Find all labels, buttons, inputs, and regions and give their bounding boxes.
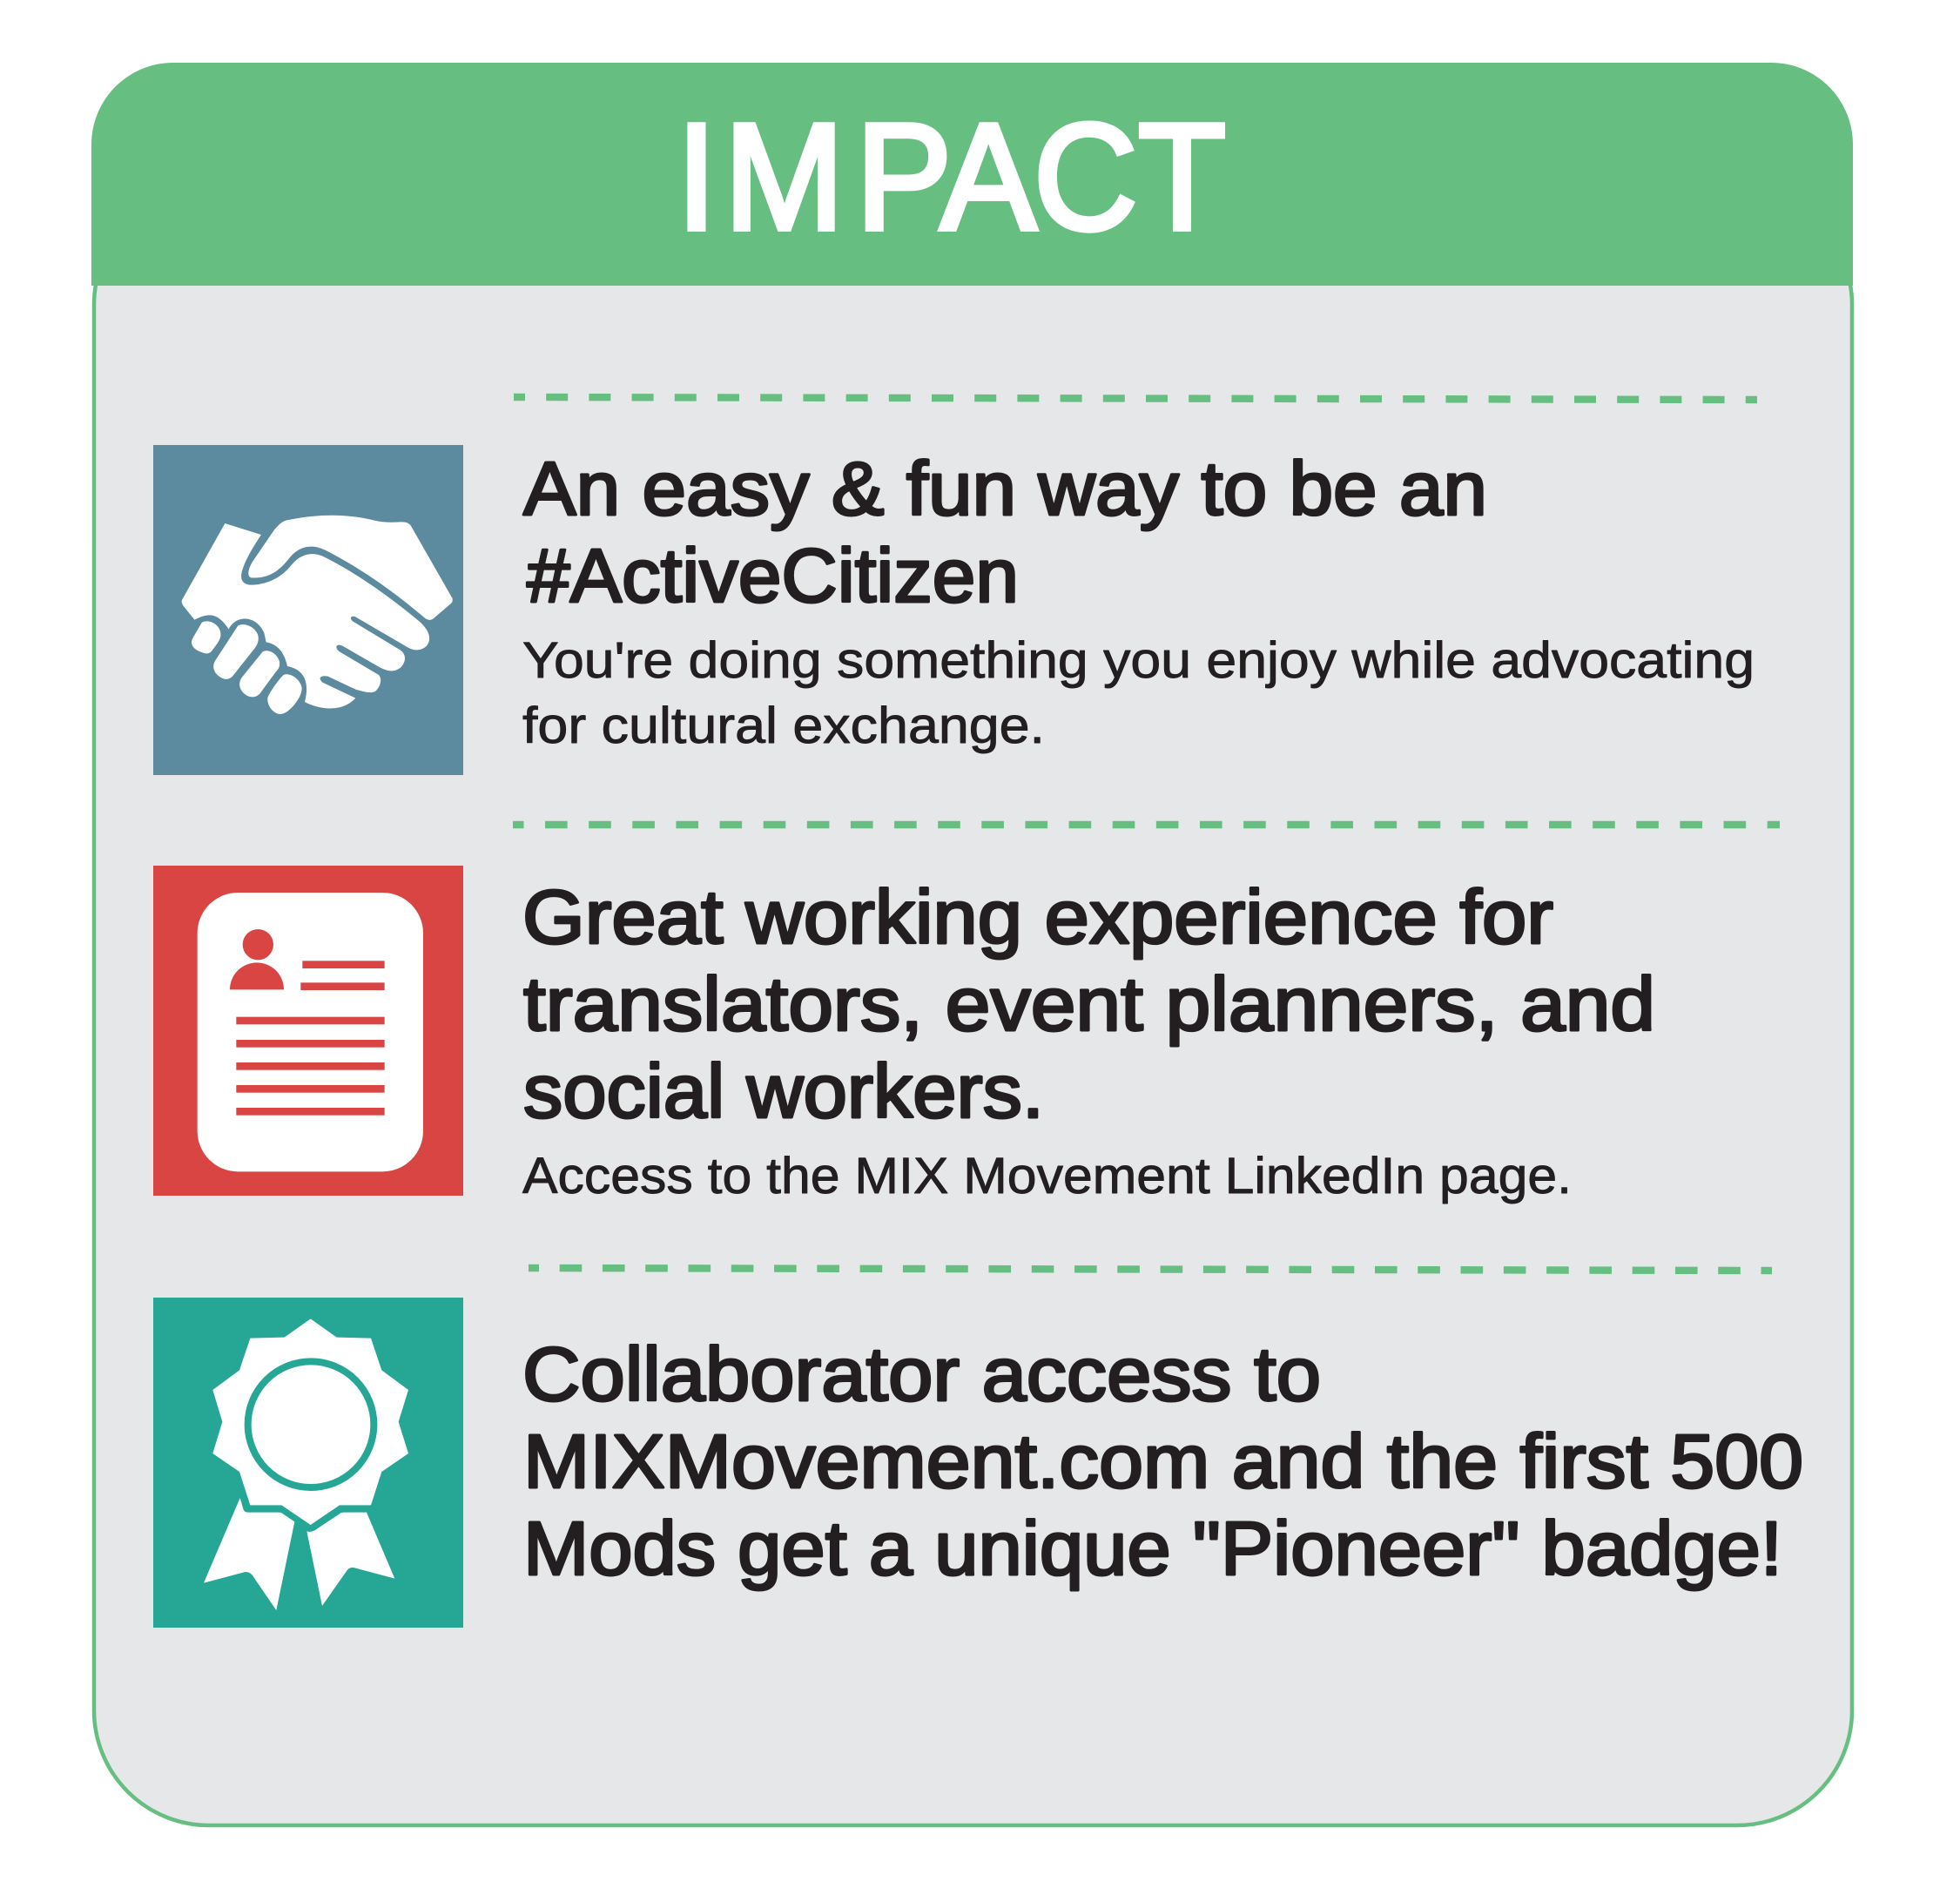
heading: collaborator access: Collaborator access to bbox=[522, 1332, 1321, 1417]
title: IMPACT bbox=[677, 91, 1226, 261]
heading: active citizen: An easy & fun way to be an bbox=[523, 447, 1487, 531]
heading: working experience: translators, event planners, and bbox=[523, 962, 1655, 1047]
heading: collaborator access bbox=[522, 1332, 1803, 1591]
body text: active citizen: for cultural exchange. bbox=[522, 698, 1045, 754]
item: collaborator access bbox=[153, 1298, 1803, 1628]
item: active citizen bbox=[153, 445, 1755, 775]
header band bbox=[91, 63, 1853, 286]
heading: working experience: Great working experience for bbox=[522, 875, 1553, 960]
panel: content background bbox=[94, 190, 1852, 1825]
icon: handshake bbox=[153, 445, 463, 775]
body text: active citizen bbox=[522, 632, 1755, 754]
item: working experience bbox=[153, 866, 1655, 1204]
heading: active citizen: #ActiveCitizen bbox=[527, 534, 1019, 618]
body text: LinkedIn access: Access to the MIX Movement LinkedIn page. bbox=[522, 1148, 1572, 1204]
body text: active citizen: You're doing something you enjoy while advocating bbox=[522, 632, 1755, 689]
heading: collaborator access: Mods get a unique "Pioneer" badge! bbox=[523, 1507, 1782, 1591]
heading: working experience: social workers. bbox=[523, 1049, 1044, 1134]
icon: resume document bbox=[153, 866, 463, 1196]
heading: active citizen bbox=[523, 447, 1487, 618]
icon: award ribbon bbox=[153, 1298, 463, 1628]
heading: working experience bbox=[522, 875, 1655, 1134]
heading: collaborator access: MIXMovement.com and the first 500 bbox=[523, 1420, 1803, 1504]
